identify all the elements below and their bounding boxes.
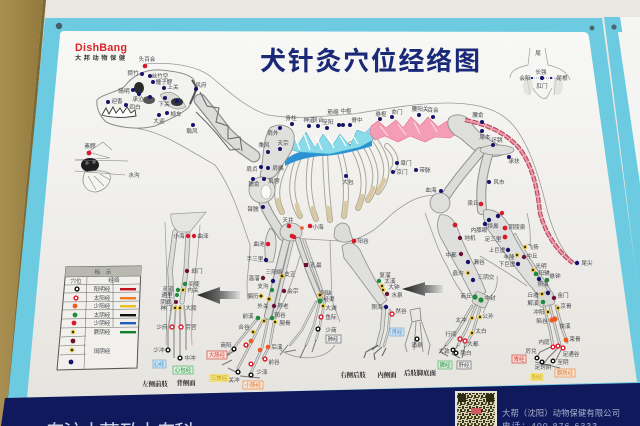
pelvis — [448, 115, 507, 156]
tag: liver: 肝经 — [459, 361, 470, 369]
labels: trunk points: 肩髎 — [268, 177, 280, 185]
label: nose inset points: 素髎 — [84, 142, 96, 150]
tag: gallbladder: 胆经 — [532, 373, 543, 381]
labels: left hind leg points: 三阴交 — [478, 273, 495, 281]
tag: triple burner: 三焦经 — [211, 374, 228, 382]
labels: left hind leg points: 中都 — [445, 251, 457, 259]
labels: medial hind limb points: 太溪 — [384, 277, 396, 285]
labels: head points: 翳风 — [186, 128, 198, 135]
labels: right hind leg points — [471, 222, 593, 371]
labels: right hind leg points: 束骨 — [569, 336, 581, 343]
labels: front leg points — [220, 216, 369, 384]
labels: front leg points: 前溪 — [242, 312, 254, 320]
labels: right hind leg points: 丰隆 — [503, 253, 515, 261]
labels: left hind leg points: 公孙 — [482, 312, 494, 320]
neighbouring poster edge — [604, 17, 640, 305]
labels: trunk points: 肩外 — [267, 129, 279, 137]
labels: right hind leg points: 犊鼻 — [487, 222, 499, 230]
labels: forelimb detail points: 劳宫 — [185, 323, 197, 331]
labels: forelimb detail points: 郄门 — [191, 267, 203, 275]
labels: trunk points — [246, 105, 520, 213]
label: nose inset points: 水沟 — [128, 171, 140, 179]
labels: front leg points: 后溪 — [271, 343, 283, 351]
label: anus inset points: 肛门 — [536, 82, 548, 90]
labels: head points: 风府 — [195, 81, 207, 89]
labels: front leg points: 阳谷 — [357, 237, 369, 245]
labels: medial hind limb points: 照海 — [371, 303, 383, 311]
labels: right hind leg points: 上巨虚 — [489, 246, 506, 254]
logo DishBang: 大邦动物保健 — [75, 54, 126, 62]
view captions: 左侧前肢 — [142, 379, 168, 388]
labels: head points: 大迎 — [153, 117, 165, 125]
label: anus inset points — [519, 50, 568, 90]
pink lumbar vertebrae — [370, 117, 456, 142]
tag: gallbladder — [530, 373, 544, 381]
labels: forelimb detail points: 阴郄 — [160, 298, 172, 306]
labels: front leg points: 支正 — [284, 270, 296, 278]
labels: right hind leg points: 内膝眼 — [471, 226, 488, 234]
legend meridian rows: 太阴经 — [94, 311, 111, 319]
labels: right hind leg points: 飞扬 — [527, 243, 539, 251]
labels: right hind leg points: 足窍阴 — [535, 363, 552, 371]
labels: forelimb detail points: 曲泽 — [197, 232, 209, 240]
labels: right hind leg points: 光明 — [535, 262, 547, 270]
labels: front leg points: 手三里 — [247, 255, 264, 263]
tag: large intestine: 大肠经 — [209, 351, 226, 359]
legend meridian rows: 太阳经 — [94, 294, 111, 302]
labels: trunk points: 身柱 — [285, 114, 297, 122]
labels: front leg points: 关冲 — [228, 376, 240, 384]
labels: medial hind limb points: 大钟 — [388, 283, 400, 291]
tag: stomach — [512, 355, 526, 363]
labels: medial hind limb points — [371, 271, 423, 349]
labels: forelimb detail points — [153, 232, 209, 362]
labels: trunk points: 臂臑 — [247, 205, 259, 213]
labels: right hind leg points: 中丘 — [526, 252, 538, 260]
red tail vertebrae — [465, 120, 573, 263]
labels: trunk points: 百会 — [427, 106, 439, 114]
view captions: 内侧面 — [377, 370, 397, 379]
tag: pericardium — [173, 366, 193, 374]
labels: front leg points: 外关 — [257, 302, 269, 310]
legend heading: 标 示 — [95, 268, 112, 276]
tag: heart: 心经 — [154, 360, 165, 368]
tag: spleen: 脾经 — [440, 361, 451, 369]
labels: right hind leg points: 尾尖 — [581, 259, 593, 267]
labels: right hind leg points: 冲阳 — [533, 308, 545, 316]
labels: right hind leg points: 阳辅 — [538, 269, 550, 277]
labels: left hind leg points: 隐白 — [460, 349, 472, 357]
tag: kidney: 肾经 — [392, 328, 403, 336]
labels: forelimb detail points: 内关 — [187, 286, 199, 294]
labels: front leg points: 大渊 — [325, 304, 337, 312]
labels: front leg points: 会宗 — [287, 287, 299, 295]
labels: right hind leg points: 陷谷 — [536, 317, 548, 325]
labels: head points — [111, 55, 207, 135]
labels: left hind leg points: 大敦 — [438, 347, 450, 355]
anus inset top right — [510, 48, 570, 98]
label: nose inset points — [84, 142, 140, 179]
tag: large intestine — [207, 351, 227, 359]
right hind leg acupoints — [471, 211, 593, 371]
labels: trunk points: 带脉 — [419, 166, 431, 174]
labels: front leg points: 天井 — [282, 216, 294, 224]
labels: trunk points: 环跳 — [491, 136, 503, 144]
labels: trunk points: 悬枢 — [375, 110, 387, 118]
labels: trunk points: 筋缩 — [327, 108, 339, 116]
labels: medial hind limb points: 涌泉 — [411, 341, 423, 349]
labels: left hind leg points: 中封 — [484, 294, 496, 302]
logo DishBang: DishBang — [75, 42, 127, 54]
labels: head points: 头百会 — [139, 55, 156, 63]
rib cage — [277, 140, 395, 220]
forelimb detail acupoints — [153, 232, 209, 362]
medial hind limb acupoints — [371, 271, 423, 349]
dog skull — [97, 70, 197, 128]
labels: forelimb detail points: 神门 — [160, 304, 172, 312]
medial right hind limb bones — [334, 223, 390, 360]
tag: small intestine — [243, 381, 263, 389]
labels: forelimb detail points: 少府 — [156, 323, 168, 331]
company contact text — [502, 408, 620, 426]
labels: right hind leg points: 足三里 — [485, 236, 502, 243]
labels: front leg points: 温溜 — [248, 274, 260, 282]
labels: forelimb detail points: 小海 — [173, 232, 185, 240]
labels: right hind leg points: 至阴 — [557, 358, 569, 366]
labels: medial hind limb points: 水泉 — [391, 291, 403, 299]
labels: right hind leg points: 京骨 — [560, 302, 572, 310]
legend meridian rows: 少阴经 — [94, 319, 111, 327]
labels: head points: 上关 — [167, 83, 179, 91]
labels: trunk points: 尾本 — [479, 133, 491, 141]
labels: front leg points: 少泽 — [256, 368, 268, 376]
legend meridian rows: 少阳经 — [94, 302, 111, 310]
labels: right hind leg points: 阴陵泉 — [509, 223, 526, 231]
labels: front leg points: 曲池 — [253, 240, 265, 248]
labels: forelimb detail points: 灵道 — [162, 285, 174, 293]
tag: spleen — [438, 361, 452, 369]
labels: right hind leg points: 内庭 — [538, 338, 550, 346]
labels: trunk points: 腰俞 — [472, 111, 484, 119]
plantar foot view — [405, 308, 430, 355]
nose inset — [75, 142, 140, 192]
labels: left hind leg points: 地机 — [464, 234, 476, 242]
labels: trunk points: 肩髃 — [272, 164, 284, 172]
labels: front leg points: 经渠 — [323, 295, 335, 303]
legend meridian rows: 阳明经 — [94, 285, 111, 293]
labels: head points: 四白 — [129, 103, 141, 111]
labels: front leg points: 支沟 — [257, 282, 269, 290]
labels: trunk points: 血海 — [425, 186, 437, 194]
labels: front leg points: 孔最 — [310, 261, 322, 269]
view captions: 后肢脚底面 — [404, 368, 437, 377]
arrow pointing to forelimb — [197, 287, 240, 304]
labels: left hind leg points: 梁丘 — [467, 199, 479, 207]
labels: front leg points: 前谷 — [268, 358, 280, 366]
view captions: 右侧后肢 — [340, 370, 366, 379]
labels: front leg points: 列缺 — [320, 289, 332, 297]
view captions — [142, 368, 437, 388]
legend sub-heading: 经络 — [108, 276, 120, 284]
title: 犬针灸穴位经络图 — [260, 41, 480, 78]
labels: right hind leg points: 侠溪 — [559, 322, 571, 330]
labels: trunk points: 京门 — [396, 168, 408, 176]
labels: head points: 承泣 — [132, 95, 144, 103]
forepaw bones — [222, 300, 325, 378]
body outline of the dog — [128, 63, 578, 358]
labels: left hind leg points: 行间 — [445, 330, 457, 338]
scapula — [260, 125, 294, 179]
arrow pointing to hind limb — [402, 282, 443, 296]
point: 素髎 — [87, 151, 91, 155]
labels: head points: 丝竹空 — [152, 72, 169, 80]
labels: trunk points: 章门 — [400, 159, 412, 167]
legend table — [57, 266, 141, 370]
left forelimb detail bones — [165, 212, 206, 358]
labels: right hind leg points: 照海 — [537, 280, 549, 288]
labels: trunk points: 承扶 — [508, 157, 520, 165]
labels: trunk points: 肩贞 — [246, 165, 258, 173]
labels: front leg points: 少商 — [325, 326, 337, 334]
labels: head points: 颊车 — [170, 110, 182, 118]
front leg bones — [249, 177, 324, 316]
labels: trunk points: 命门 — [391, 108, 403, 116]
bottom navy banner — [1, 383, 640, 426]
labels: front leg points: 腕骨 — [279, 319, 291, 327]
labels: front leg points: 养老 — [277, 302, 289, 310]
labels: head points: 睛明 — [118, 87, 130, 95]
labels: front leg points: 商阳 — [220, 341, 232, 349]
legend meridian rows: 厥阴经 — [94, 328, 111, 336]
tag: heart — [153, 360, 166, 368]
labels: left hind leg points — [438, 199, 496, 357]
labels: forelimb detail points: 通里 — [161, 291, 173, 299]
tag: lung — [326, 335, 341, 343]
hind leg bones — [430, 145, 556, 309]
labels: right hind leg points: 解溪 — [527, 299, 539, 307]
legend sub-heading — [70, 276, 120, 285]
labels: right hind leg points: 下巨虚 — [499, 260, 516, 268]
labels: trunk points: 秉风 — [258, 141, 270, 149]
tag: triple burner — [209, 374, 229, 382]
cyan thoracic vertebrae — [285, 126, 373, 166]
labels: front leg points: 合谷 — [238, 323, 250, 331]
labels: left hind leg points: 漏谷 — [473, 258, 485, 266]
labels: trunk points: 中枢 — [340, 107, 352, 115]
tag: kidney — [390, 328, 404, 336]
legend meridian rows — [94, 285, 136, 355]
labels: forelimb detail points: 大陵 — [185, 304, 197, 312]
company contact text: 大帮（沈阳）动物保健有限公司 — [502, 408, 620, 418]
labels: trunk points: 神道 — [303, 116, 315, 124]
labels: right hind leg points: 悬钟 — [549, 272, 561, 280]
labels: front leg points: 三阳络 — [266, 268, 283, 276]
left hind leg acupoints — [438, 199, 496, 357]
labels: medial hind limb points: 然谷 — [395, 307, 407, 315]
label: anus inset points: 尾 — [535, 50, 541, 57]
tag: liver — [457, 361, 471, 369]
QR code — [455, 391, 497, 426]
view captions: 背侧面 — [176, 378, 196, 387]
tag: stomach: 胃经 — [514, 355, 525, 363]
labels: trunk points: 腰阳关 — [412, 105, 429, 113]
legend meridian rows: 阔阴经 — [94, 347, 111, 355]
hind paw bones — [440, 306, 567, 368]
labels: forelimb detail points: 间使 — [188, 280, 200, 288]
labels: right hind leg points: 丘墟 — [527, 291, 539, 299]
label: anus inset points: 尾根 — [556, 74, 568, 82]
label: anus inset points: 长强 — [535, 68, 547, 76]
labels: head points: 下关 — [158, 100, 170, 108]
labels: front leg points: 偏历 — [247, 292, 259, 300]
logo DishBang — [75, 42, 127, 62]
labels: forelimb detail points: 中冲 — [184, 354, 196, 362]
labels: front leg points: 小海 — [312, 223, 324, 231]
labels: trunk points: 至阳 — [322, 118, 334, 126]
labels: trunk points: 大包 — [342, 178, 354, 186]
labels: right hind leg points: 厉兑 — [525, 347, 537, 355]
labels: trunk points: 灵台 — [312, 116, 324, 124]
tag: lung: 肺经 — [328, 335, 339, 343]
labels: trunk points: 风市 — [493, 178, 505, 186]
tag: bladder — [555, 369, 575, 377]
neck vertebrae — [196, 92, 254, 156]
tag: bladder: 膀胱经 — [557, 369, 574, 377]
labels: front leg points: 阳谷 — [274, 311, 286, 319]
labels: left hind leg points: 太白 — [475, 327, 487, 335]
front leg acupoints — [220, 216, 369, 384]
labels: left hind leg points: 蠡沟 — [452, 269, 464, 277]
tag: pericardium: 心包经 — [175, 366, 192, 374]
tag: small intestine: 小肠经 — [245, 381, 262, 389]
labels: left hind leg points: 大都 — [467, 340, 479, 348]
labels: trunk points: 臑俞 — [248, 180, 260, 188]
label: anus inset points: 会阳 — [519, 74, 531, 82]
labels: right hind leg points: 足通谷 — [563, 350, 580, 358]
labels: head points: 瞳子髎 — [156, 78, 173, 86]
labels: right hind leg points: 金门 — [557, 291, 569, 299]
trunk acupoints — [246, 105, 520, 213]
labels: forelimb detail points: 少冲 — [153, 346, 165, 354]
labels: head points: 攒竹 — [127, 69, 139, 77]
legend sub-heading: 穴位 — [70, 277, 82, 285]
labels: left hind leg points: 商丘 — [460, 292, 472, 300]
labels: head points: 迎香 — [111, 97, 123, 105]
labels: trunk points: 天宗 — [277, 139, 289, 147]
meridian tags — [153, 328, 575, 389]
labels: left hind leg points: 太冲 — [455, 316, 467, 324]
labels: front leg points: 鱼际 — [325, 313, 337, 321]
legend point markers — [69, 287, 79, 364]
labels: medial hind limb points: 复溜 — [379, 271, 391, 279]
head acupoints — [106, 55, 207, 135]
labels: trunk points: 脊中 — [351, 116, 363, 124]
